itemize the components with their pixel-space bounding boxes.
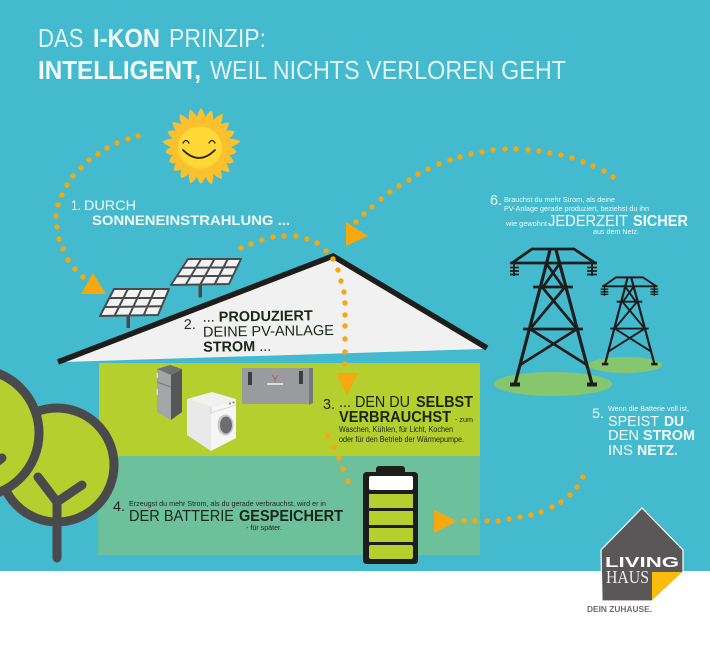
step 6 text: Brauchst du mehr Strom, als deine: [504, 195, 615, 204]
step 1 text: SONNENEINSTRAHLUNG ...: [92, 212, 290, 228]
step 2 text: STROM: [203, 339, 255, 356]
step 2 text: PRODUZIERT: [219, 308, 313, 326]
step 3 text: - zum: [455, 415, 473, 424]
icon: tree right: [0, 408, 114, 558]
step 3 text: VERBRAUCHST: [339, 409, 451, 426]
step 5 text: DU: [664, 413, 684, 430]
step 1 text: [71, 197, 290, 228]
title: DAS: [38, 23, 84, 53]
logo: Living Haus: DEIN ZUHAUSE.: [587, 605, 652, 614]
roof: [58, 256, 487, 362]
icon: large pylon ground: [494, 372, 612, 396]
icon: home storage unit: [242, 368, 313, 405]
title: INTELLIGENT,: [38, 55, 201, 85]
step 1 text: 1.: [71, 197, 81, 213]
step 3 text: oder für den Betrieb der Wärmepumpe.: [339, 435, 464, 444]
step 5 text: STROM: [643, 427, 695, 444]
step 1 text: DURCH: [84, 197, 136, 213]
step 2 text: [184, 308, 335, 356]
step 5 text: Wenn die Batterie voll ist,: [608, 404, 689, 413]
logo: Living Haus: HAUS: [606, 567, 649, 587]
step 5 text: [592, 404, 695, 459]
dotted arrow: battery to grid: [434, 474, 586, 533]
step 6 text: aus dem Netz.: [593, 227, 639, 236]
step 6 text: PV-Anlage gerade produziert, beziehst du ihn: [504, 204, 649, 213]
dotted arrow: grid to house: [346, 146, 616, 246]
logo: Living Haus: LIVING: [605, 554, 679, 571]
step 6 text: JEDERZEIT: [548, 213, 628, 230]
icon: battery: [363, 466, 418, 564]
step 3 text: [323, 394, 473, 444]
step 6 text: SICHER: [633, 213, 688, 230]
step 5 text: SPEIST: [608, 413, 659, 430]
step 6 text: wie gewohnt: [505, 219, 548, 228]
step 6 text: [490, 192, 688, 236]
step 5 text: NETZ.: [637, 442, 678, 459]
panel: consumption floor: [99, 363, 480, 456]
step 2 text: ...: [203, 310, 215, 326]
icon: washing machine: [187, 392, 236, 451]
icon: solar panel left: [100, 289, 169, 328]
step 3 text: ... DEN DU: [339, 394, 410, 411]
step 5 text: 5.: [592, 405, 604, 421]
step 4 text: Erzeugst du mehr Strom, als du gerade verbrauchst, wird er in: [129, 499, 326, 508]
step 2 text: 2.: [184, 316, 196, 332]
title: [38, 23, 566, 85]
step 5 text: DEN: [608, 427, 639, 444]
step 4 text: - für später.: [246, 523, 282, 532]
step 6 text: 6.: [490, 192, 502, 209]
icon: large pylon: [510, 249, 597, 384]
step 3 text: SELBST: [416, 394, 473, 411]
step 3 text: Waschen, Kühlen, für Licht, Kochen: [339, 425, 453, 434]
icon: small pylon: [601, 277, 658, 364]
step 4 text: 4.: [113, 498, 125, 514]
icon: tree left: [0, 369, 39, 497]
dotted line: consumption to battery: [325, 433, 351, 484]
title: I-KON: [93, 23, 160, 53]
step 2 text: DEINE PV-ANLAGE: [203, 323, 334, 341]
step 4 text: DER BATTERIE: [129, 508, 234, 525]
panel: storage floor: [98, 456, 480, 555]
dotted arrow: panels to house: [238, 233, 358, 395]
logo: Living Haus: [587, 508, 683, 614]
icon: solar panel right: [171, 259, 241, 298]
dotted arrow: sun to panels: [53, 133, 141, 294]
icon: small pylon ground: [588, 357, 662, 373]
step 2 text: ...: [259, 339, 271, 355]
step 3 text: 3.: [323, 396, 335, 413]
step 5 text: INS: [608, 442, 633, 459]
step 4 text: [113, 498, 343, 532]
step 4 text: GESPEICHERT: [239, 508, 343, 525]
icon: fridge: [156, 365, 182, 420]
icon: sun: [162, 108, 241, 186]
title: WEIL NICHTS VERLOREN GEHT: [210, 55, 566, 85]
title: PRINZIP:: [169, 23, 266, 53]
